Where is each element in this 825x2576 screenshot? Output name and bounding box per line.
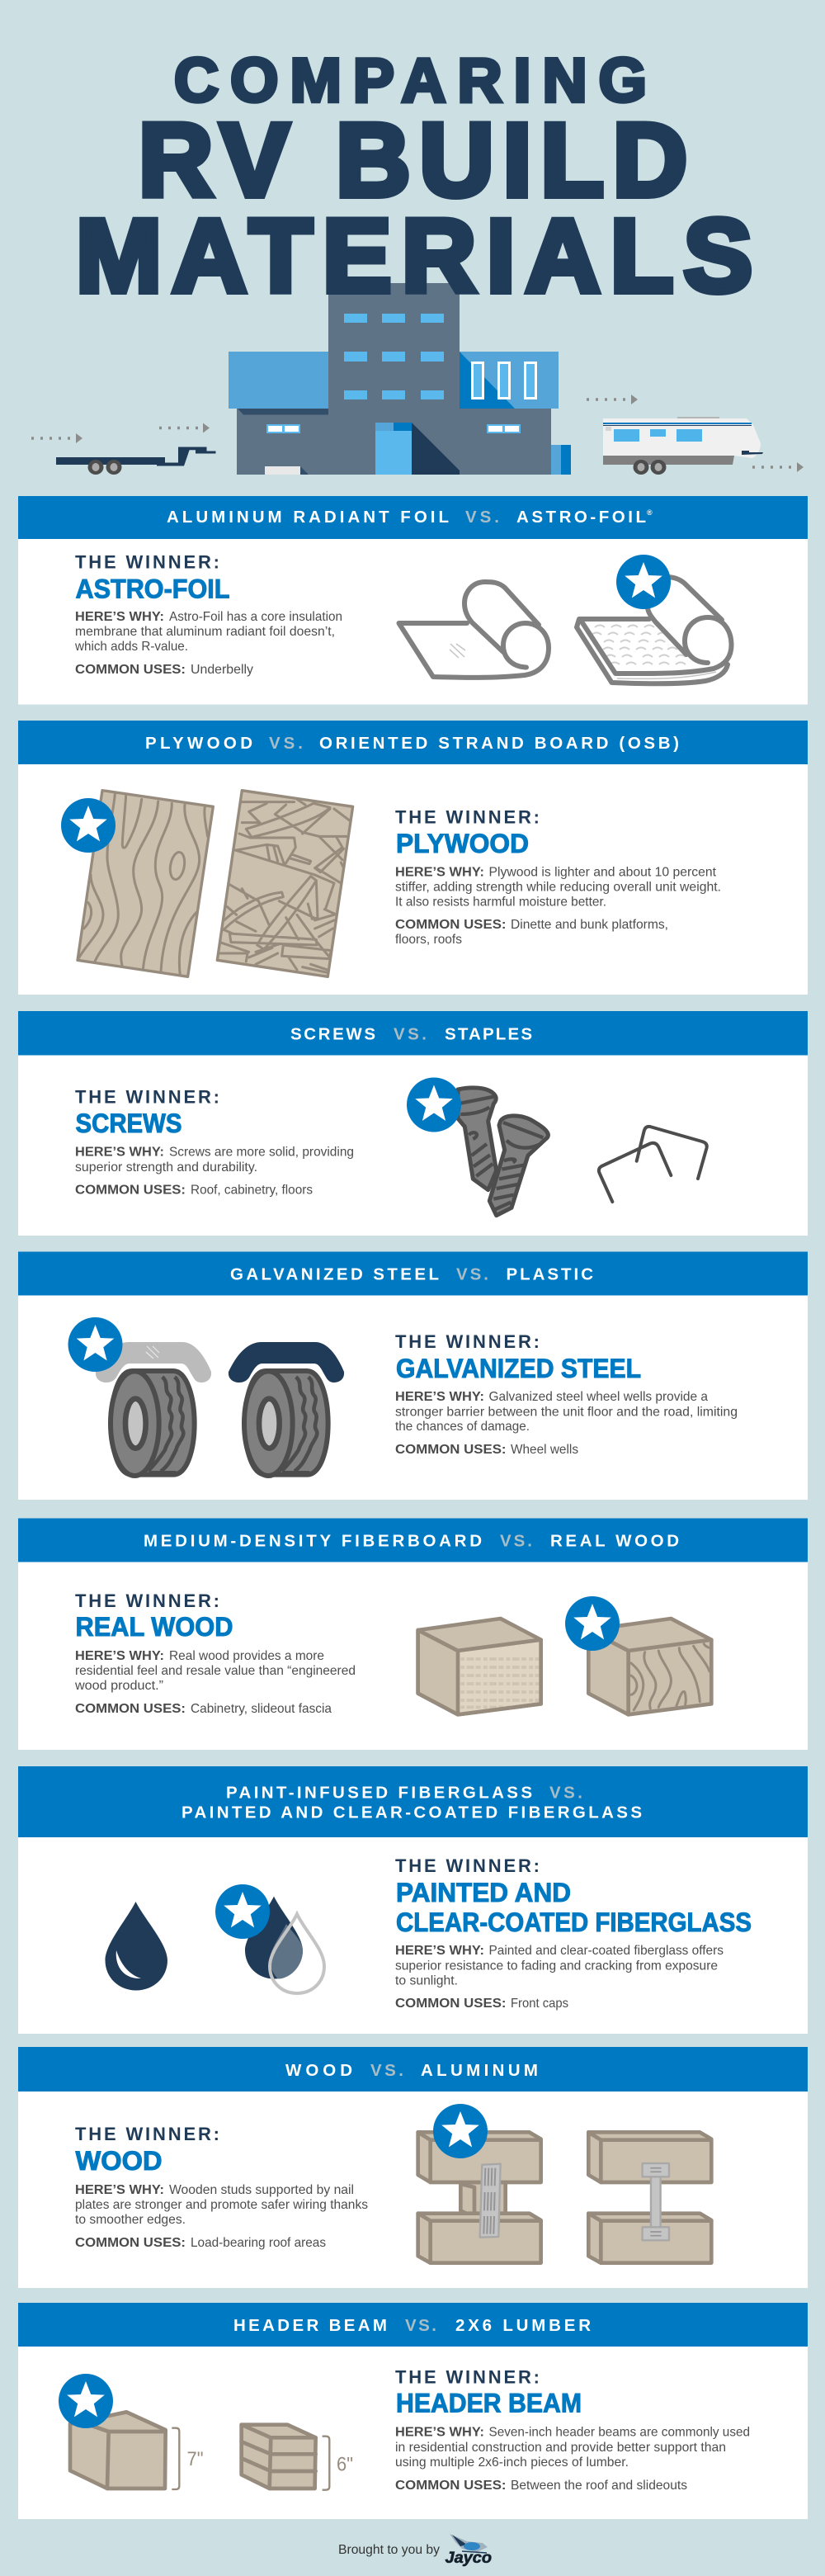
text: wood winner: COMMON USES: xyxy=(75,2236,186,2250)
icon: plastic fender xyxy=(229,1342,344,1383)
text: beam winner: HEADER BEAM xyxy=(396,2389,582,2418)
panel: real wood xyxy=(18,1519,808,1750)
text: plywood winner: PLYWOOD xyxy=(396,829,529,858)
icon: first screw xyxy=(458,1088,497,1190)
heading: wood comparison: WOOD xyxy=(285,2061,352,2080)
heading: screws comparison xyxy=(290,1025,532,1043)
text: real wood winner: REAL WOOD xyxy=(76,1612,233,1642)
heading: beam comparison xyxy=(233,2316,591,2335)
heading: fiberboard comparison: REAL WOOD xyxy=(550,1532,679,1550)
text: fiberglass winner: HERE’S WHY: xyxy=(395,1944,484,1958)
icon: Jayco bird logo xyxy=(450,2534,488,2553)
bracket: seven inch xyxy=(172,2428,179,2489)
icon: single paint drop xyxy=(106,1902,167,1991)
text: galvanized winner xyxy=(395,1331,738,1457)
heading: fiberboard comparison: VS. xyxy=(500,1532,532,1550)
text: galvanized winner: Wheel wells xyxy=(511,1443,578,1457)
arrow: trailer left xyxy=(31,433,82,443)
icon: fifth-wheel RV xyxy=(603,417,763,475)
icon: staples xyxy=(599,1127,707,1202)
text: fiberglass winner: superior resistance to fading and cracking from exposure xyxy=(395,1959,718,1973)
footer: brought to you by xyxy=(338,2534,492,2567)
text: plywood winner: stiffer, adding strength while reducing overall unit weight. xyxy=(395,880,721,895)
text: wood winner: HERE’S WHY: xyxy=(75,2183,164,2197)
text: plywood winner: THE WINNER: xyxy=(395,807,540,827)
text: foil winner: ASTRO-FOIL xyxy=(76,574,229,604)
heading: fiberglass comparison: VS. xyxy=(549,1783,582,1803)
icon: 2x6 lumber xyxy=(242,2425,353,2490)
text: galvanized winner: THE WINNER: xyxy=(395,1331,540,1352)
arrow: RV top xyxy=(587,395,638,404)
text: fiberglass winner xyxy=(395,1855,752,2011)
text: screws winner xyxy=(75,1086,354,1197)
text: fiberglass winner: to sunlight. xyxy=(395,1974,458,1988)
icon: wood studs with nail plate xyxy=(418,2104,541,2263)
panel: galvanized steel xyxy=(18,1251,808,1500)
heading: fiberglass comparison: PAINT-INFUSED FIBERGLASS xyxy=(226,1783,532,1803)
text: beam winner: HERE’S WHY: xyxy=(395,2425,484,2440)
icon: painted drop with clear coat xyxy=(215,1884,324,1993)
heading: screws comparison: STAPLES xyxy=(445,1025,532,1043)
icon: flatbed trailer xyxy=(56,447,216,475)
text: galvanized winner: stronger barrier between the unit floor and the road, limiting xyxy=(395,1405,738,1420)
icon: building xyxy=(229,283,571,475)
text: plywood winner: COMMON USES: xyxy=(395,918,507,932)
text: fiberglass winner: THE WINNER: xyxy=(395,1855,540,1876)
text: screws winner: superior strength and durability. xyxy=(75,1160,257,1175)
text: foil winner: HERE’S WHY: xyxy=(75,610,164,624)
panel: plywood xyxy=(18,721,808,995)
text: screws winner: HERE’S WHY: xyxy=(75,1146,164,1159)
text: screws winner: COMMON USES: xyxy=(75,1184,186,1197)
heading: foil comparison: VS. xyxy=(465,508,499,527)
heading: galvanized comparison: GALVANIZED STEEL xyxy=(230,1264,439,1284)
text: wood winner: WOOD xyxy=(76,2146,162,2176)
icon: tire xyxy=(111,1371,195,1476)
arrow: trailer right xyxy=(159,423,210,432)
text: wood winner: plates are stronger and promote safer wiring thanks xyxy=(75,2198,368,2212)
panel: wood studs xyxy=(18,2047,808,2288)
panel: foil xyxy=(18,496,808,705)
badge: winner star xyxy=(565,1596,620,1651)
text: galvanized winner: Galvanized steel wheel wells provide a xyxy=(488,1390,708,1404)
label: six inches: 6" xyxy=(337,2453,353,2476)
heading: plywood comparison: VS. xyxy=(269,734,303,753)
text: screws winner: SCREWS xyxy=(76,1108,182,1138)
logo: Jayco wordmark: Jayco xyxy=(446,2550,492,2567)
badge: winner star xyxy=(616,555,671,609)
text: real wood winner: residential feel and resale value than “engineered xyxy=(75,1664,356,1678)
text: fiberglass winner: Front caps xyxy=(511,1997,568,2011)
icon: tire xyxy=(244,1371,328,1476)
text: beam winner: Between the roof and slideouts xyxy=(511,2479,687,2493)
heading: wood comparison xyxy=(285,2061,538,2080)
title: COMPARING xyxy=(174,45,647,115)
badge: winner star xyxy=(59,2374,113,2428)
heading: screws comparison: VS. xyxy=(394,1025,427,1043)
text: galvanized winner: HERE’S WHY: xyxy=(395,1390,484,1404)
heading: foil comparison xyxy=(167,508,653,527)
heading: fiberglass comparison xyxy=(182,1783,642,1822)
heading: beam comparison: VS. xyxy=(405,2316,436,2335)
arrow: RV bottom xyxy=(752,462,804,472)
text: real wood winner: Real wood provides a more xyxy=(169,1649,324,1663)
text: beam winner: using multiple 2x6-inch pieces of lumber. xyxy=(395,2455,629,2470)
badge: winner star xyxy=(68,1317,122,1372)
title: RV BUILD xyxy=(139,103,687,218)
text: real wood winner: THE WINNER: xyxy=(75,1591,219,1611)
icon: plastic wheel xyxy=(229,1342,344,1476)
title: MATERIALS xyxy=(76,199,752,314)
text: plywood winner: Dinette and bunk platforms, xyxy=(511,918,668,932)
text: fiberglass winner: COMMON USES: xyxy=(395,1997,507,2011)
text: galvanized winner: the chances of damage. xyxy=(395,1420,530,1434)
icon: wood blocks with aluminum stud xyxy=(588,2132,711,2263)
panel: header beam xyxy=(18,2303,808,2519)
text: fiberglass winner: PAINTED AND xyxy=(396,1878,571,1907)
icon: OSB sheet xyxy=(217,791,353,976)
icon: galvanized wheel xyxy=(68,1317,211,1476)
text: wood winner xyxy=(75,2124,368,2250)
text: plywood winner: HERE’S WHY: xyxy=(395,865,484,880)
text: foil winner: COMMON USES: xyxy=(75,663,186,677)
title xyxy=(76,45,752,314)
badge: winner star xyxy=(433,2104,488,2158)
icon: fiberboard cube xyxy=(418,1619,541,1714)
heading: plywood comparison: PLYWOOD xyxy=(145,734,252,753)
text: foil winner: membrane that aluminum radiant foil doesn’t, xyxy=(75,625,335,639)
icon: screws xyxy=(407,1078,548,1216)
badge: winner star xyxy=(407,1078,461,1132)
text: screws winner: Screws are more solid, providing xyxy=(169,1146,354,1159)
text: real wood winner: wood product.” xyxy=(74,1679,163,1693)
text: plywood winner: It also resists harmful moisture better. xyxy=(395,895,606,910)
text: real wood winner: HERE’S WHY: xyxy=(75,1649,164,1663)
text: foil winner xyxy=(74,551,342,677)
icon: aluminum stud xyxy=(643,2163,669,2240)
heading: beam comparison: HEADER BEAM xyxy=(233,2316,387,2335)
icon: second screw xyxy=(489,1116,548,1216)
heading: beam comparison: 2X6 LUMBER xyxy=(455,2316,591,2335)
badge: winner star xyxy=(215,1884,270,1939)
text: real wood winner xyxy=(74,1591,356,1716)
text: fiberglass winner: CLEAR-COATED FIBERGLASS xyxy=(396,1907,752,1937)
text: wood winner: Wooden studs supported by nail xyxy=(169,2183,354,2197)
heading: foil comparison: ALUMINUM RADIANT FOIL xyxy=(167,508,449,527)
heading: wood comparison: ALUMINUM xyxy=(421,2061,538,2080)
text: wood winner: to smoother edges. xyxy=(75,2213,186,2227)
text: wood winner: THE WINNER: xyxy=(75,2124,219,2144)
text: screws winner: Roof, cabinetry, floors xyxy=(191,1184,313,1197)
icon: plywood sheet xyxy=(61,791,213,976)
heading: foil comparison: ASTRO-FOIL xyxy=(516,508,646,527)
heading: galvanized comparison xyxy=(230,1264,593,1284)
panel: fiberglass xyxy=(18,1766,808,2034)
text: fiberglass winner: Painted and clear-coated fiberglass offers xyxy=(488,1944,724,1958)
text: galvanized winner: GALVANIZED STEEL xyxy=(396,1354,641,1383)
heading: wood comparison: VS. xyxy=(370,2061,403,2080)
heading: plywood comparison xyxy=(145,734,679,753)
heading: galvanized comparison: VS. xyxy=(456,1264,488,1284)
text: foil winner: Underbelly xyxy=(191,663,253,677)
text: real wood winner: Cabinetry, slideout fascia xyxy=(191,1702,332,1716)
text: beam winner: Seven-inch header beams are commonly used xyxy=(488,2425,750,2440)
label: seven inches: 7" xyxy=(186,2448,203,2470)
icon: real wood cube xyxy=(565,1596,711,1714)
text: foil winner: THE WINNER: xyxy=(75,551,219,573)
heading: fiberboard comparison xyxy=(144,1532,679,1550)
illustration: building and RVs xyxy=(31,283,804,475)
text: beam winner: in residential construction and provide better support than xyxy=(395,2441,726,2455)
heading: screws comparison: SCREWS xyxy=(290,1025,375,1043)
heading: galvanized comparison: PLASTIC xyxy=(507,1264,593,1284)
text: foil winner: which adds R-value. xyxy=(74,640,188,654)
text: wood winner: Load-bearing roof areas xyxy=(191,2236,326,2250)
text: real wood winner: COMMON USES: xyxy=(75,1702,186,1716)
text: beam winner xyxy=(395,2367,750,2493)
icon: header beam xyxy=(59,2374,203,2489)
text: foil winner: Astro-Foil has a core insulation xyxy=(169,610,342,624)
icon: steel fender xyxy=(96,1342,211,1383)
badge: winner star xyxy=(61,798,116,853)
text: plywood winner xyxy=(395,807,721,947)
heading: foil comparison: ® xyxy=(647,508,653,517)
text: beam winner: COMMON USES: xyxy=(395,2479,507,2493)
bracket: six inch xyxy=(323,2437,329,2490)
icon: aluminum foil roll xyxy=(399,582,549,678)
heading: plywood comparison: ORIENTED STRAND BOARD (OSB) xyxy=(319,734,679,753)
footer: brought to you by: Brought to you by xyxy=(338,2543,440,2557)
heading: fiberglass comparison: PAINTED AND CLEAR-COATED FIBERGLASS xyxy=(182,1803,642,1822)
text: galvanized winner: COMMON USES: xyxy=(395,1443,507,1457)
icon: nail plate xyxy=(480,2164,501,2238)
text: beam winner: THE WINNER: xyxy=(395,2367,540,2387)
text: screws winner: THE WINNER: xyxy=(75,1086,219,1108)
text: plywood winner: floors, roofs xyxy=(395,933,462,947)
text: plywood winner: Plywood is lighter and about 10 percent xyxy=(488,865,717,880)
panel: screws xyxy=(18,1011,808,1236)
icon: astro-foil roll xyxy=(577,555,732,683)
heading: fiberboard comparison: MEDIUM-DENSITY FIBERBOARD xyxy=(144,1532,482,1550)
